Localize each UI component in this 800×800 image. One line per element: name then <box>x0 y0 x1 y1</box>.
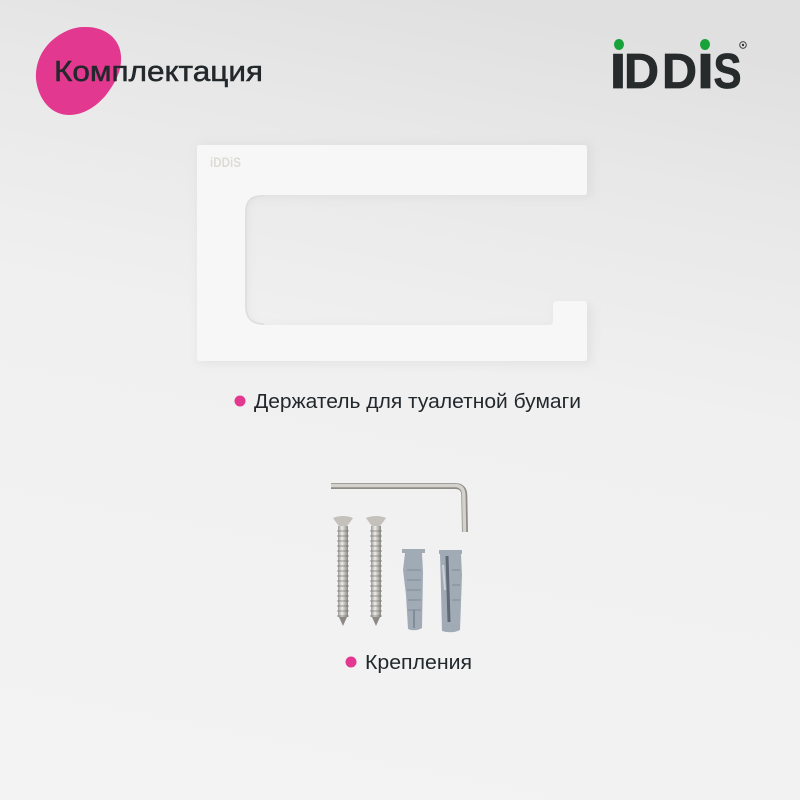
logo: IDDIS <box>610 39 746 99</box>
logo wordmark: S <box>714 45 742 99</box>
logo wordmark: D <box>662 45 697 99</box>
logo wordmark: D <box>624 45 659 99</box>
label text: Крепления <box>365 652 472 674</box>
registered mark <box>740 42 746 48</box>
heading text: Комплектация <box>54 56 263 88</box>
holder body <box>197 145 587 361</box>
screw 1 <box>333 516 353 626</box>
wall plug 2 <box>439 550 462 632</box>
holder shadow <box>198 144 592 364</box>
label: fasteners <box>346 652 472 674</box>
holder inner edge shade <box>246 196 264 324</box>
logo wordmark <box>610 45 742 99</box>
pink blob <box>36 27 121 115</box>
label text: Держатель для туалетной бумаги <box>254 391 581 413</box>
logo wordmark: I <box>697 45 714 99</box>
product: toilet paper holder <box>197 144 592 364</box>
wall plug 1 <box>402 549 425 630</box>
logo green dots <box>614 39 710 50</box>
bullet <box>234 396 246 406</box>
screw 2 <box>366 516 386 626</box>
hardware set <box>331 486 465 632</box>
bullet <box>346 656 356 668</box>
hex key <box>331 486 465 532</box>
logo wordmark: I <box>610 45 626 99</box>
engraved logo: iDDiS <box>210 154 241 170</box>
heading: Комплектация with pink blob <box>36 27 263 115</box>
label: holder <box>234 391 581 413</box>
